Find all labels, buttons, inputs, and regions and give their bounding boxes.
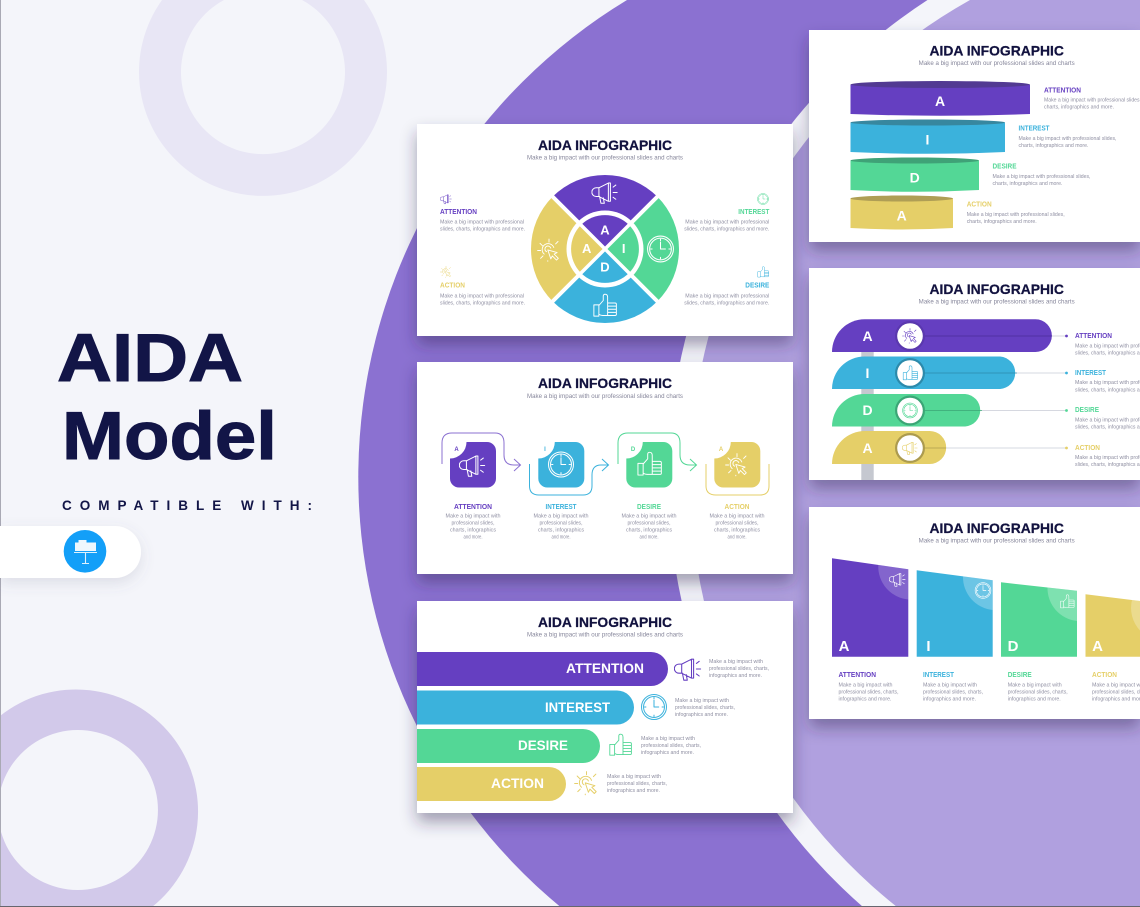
- main title: [57, 321, 277, 474]
- interest block: [684, 193, 770, 233]
- action block: Make a big impact with professional: [440, 293, 524, 299]
- column: action: ACTION: [1092, 672, 1117, 679]
- cylinder: action: Make a big impact with professional slides,: [967, 212, 1065, 218]
- attention block: ATTENTION: [440, 209, 477, 216]
- cylinder: interest: Make a big impact with professional slides,: [1018, 136, 1117, 142]
- column: desire: professional slides, charts,: [1008, 690, 1068, 696]
- desire block: Make a big impact with professional: [685, 293, 769, 299]
- column: attention: professional slides, charts,: [838, 690, 899, 696]
- bar: attention: professional slides, charts,: [709, 666, 769, 672]
- panel: circle diagram: [417, 124, 793, 336]
- column: desire: [1001, 582, 1077, 703]
- step: action: Make a big impact with: [710, 514, 764, 520]
- column: interest: [917, 570, 993, 703]
- step: interest: charts, infographics: [538, 528, 584, 534]
- bar: action: infographics and more.: [607, 788, 660, 794]
- cylinder: desire: Make a big impact with professional slides,: [992, 174, 1091, 180]
- bar: desire: Make a big impact with: [641, 736, 695, 742]
- compatible with label: COMPATIBLE WITH:: [62, 498, 312, 513]
- step: interest: I: [544, 447, 546, 453]
- heading: AIDA INFOGRAPHIC: [929, 281, 1064, 297]
- sign: desire: [832, 394, 1140, 430]
- interest block: slides, charts, infographics and more.: [684, 227, 770, 233]
- bar: interest: professional slides, charts,: [675, 705, 735, 711]
- cylinder: attention: charts, infographics and more.: [1044, 105, 1114, 111]
- desire block: slides, charts, infographics and more.: [684, 300, 770, 306]
- heading: AIDA INFOGRAPHIC: [538, 375, 672, 391]
- step: desire: [618, 433, 696, 541]
- step: interest: [530, 442, 608, 541]
- column: attention: [832, 558, 908, 703]
- interest block: Make a big impact with professional: [685, 220, 769, 226]
- column: interest: Make a big impact with: [923, 683, 977, 689]
- column: attention: Make a big impact with: [838, 683, 892, 689]
- heading: AIDA INFOGRAPHIC: [538, 137, 672, 153]
- cylinder: attention: ATTENTION: [1044, 87, 1081, 94]
- attention block: [440, 195, 525, 233]
- subheading: Make a big impact with our professional slides and charts: [919, 300, 1075, 306]
- sign: desire: DESIRE: [1075, 407, 1099, 414]
- decorative ring: top: [139, 0, 387, 196]
- bar: interest: infographics and more.: [675, 712, 728, 718]
- separator circle: [668, 0, 1140, 907]
- subheading: Make a big impact with our professional slides and charts: [527, 632, 683, 638]
- large purple circle: [358, 0, 1140, 907]
- column: attention: A: [839, 638, 850, 655]
- icon: megaphone: [592, 183, 617, 203]
- sign: attention: [832, 319, 1140, 356]
- pie chart: A: [582, 241, 592, 256]
- step: desire: D: [631, 447, 636, 453]
- cylinder: interest: I: [926, 132, 929, 148]
- column: interest: infographics and more.: [923, 697, 976, 703]
- desire block: DESIRE: [745, 283, 770, 290]
- icon: keynote: [64, 530, 106, 573]
- column: interest: INTEREST: [923, 672, 955, 679]
- sign: attention: ATTENTION: [1075, 333, 1112, 340]
- subheading: Make a big impact with our professional slides and charts: [527, 156, 683, 162]
- step: action: A: [719, 447, 724, 453]
- cylinder: desire: charts, infographics and more.: [992, 181, 1063, 187]
- subheading: Make a big impact with our professional slides and charts: [919, 61, 1075, 67]
- attention block: Make a big impact with professional: [440, 220, 524, 226]
- step: attention: A: [454, 447, 459, 453]
- bar: action: Make a big impact with: [607, 774, 661, 780]
- sign: attention: A: [862, 328, 873, 344]
- panel: signpost: [809, 268, 1140, 480]
- bar: interest: [417, 690, 735, 724]
- sign: action: A: [862, 440, 873, 456]
- cylinder: desire: [850, 158, 1091, 192]
- cylinder: desire: D: [910, 170, 920, 186]
- icon: thumb: [594, 294, 616, 316]
- column: action: [1086, 594, 1140, 703]
- cylinder: interest: charts, infographics and more.: [1018, 143, 1089, 149]
- column: interest: I: [926, 638, 931, 655]
- subheading: Make a big impact with our professional slides and charts: [527, 394, 683, 400]
- column: desire: Make a big impact with: [1008, 683, 1062, 689]
- cylinder: desire: DESIRE: [992, 164, 1017, 170]
- step: attention: Make a big impact with: [446, 514, 500, 520]
- icon: click: [538, 239, 558, 261]
- compatibility pill: [0, 526, 141, 578]
- sign: interest: INTEREST: [1075, 370, 1107, 377]
- column: desire: D: [1008, 638, 1019, 655]
- panel: columns: [809, 507, 1140, 719]
- sign: interest: I: [866, 365, 869, 381]
- panel: stacked bars: [417, 601, 793, 813]
- sign: interest: [832, 356, 1140, 394]
- bar: desire: infographics and more.: [641, 750, 694, 756]
- panel: process arrows: [417, 362, 793, 574]
- pie chart: A: [600, 222, 610, 238]
- cylinder: interest: [850, 120, 1117, 154]
- column: interest: professional slides, charts,: [923, 690, 983, 696]
- heading: AIDA INFOGRAPHIC: [538, 614, 672, 630]
- column: attention: infographics and more.: [838, 697, 892, 703]
- pie chart: I: [622, 241, 626, 256]
- action block: slides, charts, infographics and more.: [440, 300, 525, 306]
- step: action: [706, 442, 769, 541]
- step: attention: and more.: [464, 535, 483, 541]
- bar: desire: DESIRE: [518, 737, 568, 753]
- step: desire: professional slides,: [628, 521, 671, 527]
- heading: AIDA INFOGRAPHIC: [929, 43, 1064, 59]
- step: desire: Make a big impact with: [622, 514, 676, 520]
- sign: action: [832, 431, 1140, 468]
- bar: action: professional slides, charts,: [607, 781, 667, 787]
- light purple circle: [690, 0, 1140, 907]
- cylinder: action: charts, infographics and more.: [967, 219, 1037, 225]
- pie chart: D: [600, 260, 610, 274]
- bar: attention: infographics and more.: [709, 673, 762, 679]
- bar: interest: INTEREST: [545, 699, 610, 715]
- sign: desire: D: [862, 402, 873, 418]
- main title: AIDA: [57, 321, 243, 396]
- bar: interest: Make a big impact with: [675, 698, 729, 704]
- step: action: charts, infographics: [714, 528, 760, 534]
- action block: ACTION: [440, 283, 465, 290]
- step: desire: DESIRE: [637, 504, 661, 511]
- bar: action: [417, 767, 667, 801]
- step: action: and more.: [728, 535, 747, 541]
- cylinder: interest: INTEREST: [1018, 126, 1050, 132]
- cylinder: action: A: [897, 208, 907, 224]
- icon: clock: [648, 236, 673, 262]
- step: attention: professional slides,: [452, 521, 495, 527]
- step: action: ACTION: [724, 504, 750, 511]
- cylinder: action: ACTION: [967, 202, 992, 209]
- bar: attention: ATTENTION: [566, 660, 644, 676]
- bar: desire: [417, 729, 701, 763]
- step: attention: charts, infographics: [450, 528, 496, 534]
- column: desire: infographics and more.: [1008, 697, 1061, 703]
- column: action: A: [1092, 638, 1103, 655]
- pie chart: [531, 175, 679, 323]
- cylinder: attention: [850, 81, 1140, 116]
- bar: attention: Make a big impact with: [709, 659, 763, 665]
- step: desire: and more.: [640, 535, 659, 541]
- attention block: slides, charts, infographics and more.: [440, 227, 525, 233]
- step: action: professional slides,: [716, 521, 759, 527]
- bar: desire: professional slides, charts,: [641, 743, 701, 749]
- cylinder: action: [850, 196, 1065, 230]
- main title: Model: [62, 399, 277, 474]
- step: interest: INTEREST: [546, 504, 577, 511]
- column: attention: ATTENTION: [838, 672, 876, 679]
- panel: cylinders: [809, 30, 1140, 242]
- action block: [440, 266, 525, 306]
- step: attention: ATTENTION: [454, 504, 492, 511]
- step: interest: Make a big impact with: [534, 514, 588, 520]
- desire block: [684, 267, 770, 306]
- step: interest: and more.: [552, 535, 571, 541]
- bar: attention: [417, 652, 769, 686]
- interest block: INTEREST: [738, 209, 770, 216]
- decorative ring: bottom left: [0, 689, 198, 907]
- signpost pole: [861, 350, 874, 480]
- step: interest: professional slides,: [540, 521, 583, 527]
- column: desire: DESIRE: [1008, 672, 1032, 679]
- step: attention: [442, 433, 520, 541]
- sign: action: ACTION: [1075, 445, 1100, 452]
- bar: action: ACTION: [491, 775, 544, 791]
- heading: AIDA INFOGRAPHIC: [929, 520, 1064, 536]
- cylinder: attention: A: [935, 93, 945, 109]
- step: desire: charts, infographics: [626, 528, 672, 534]
- subheading: Make a big impact with our professional slides and charts: [919, 538, 1075, 544]
